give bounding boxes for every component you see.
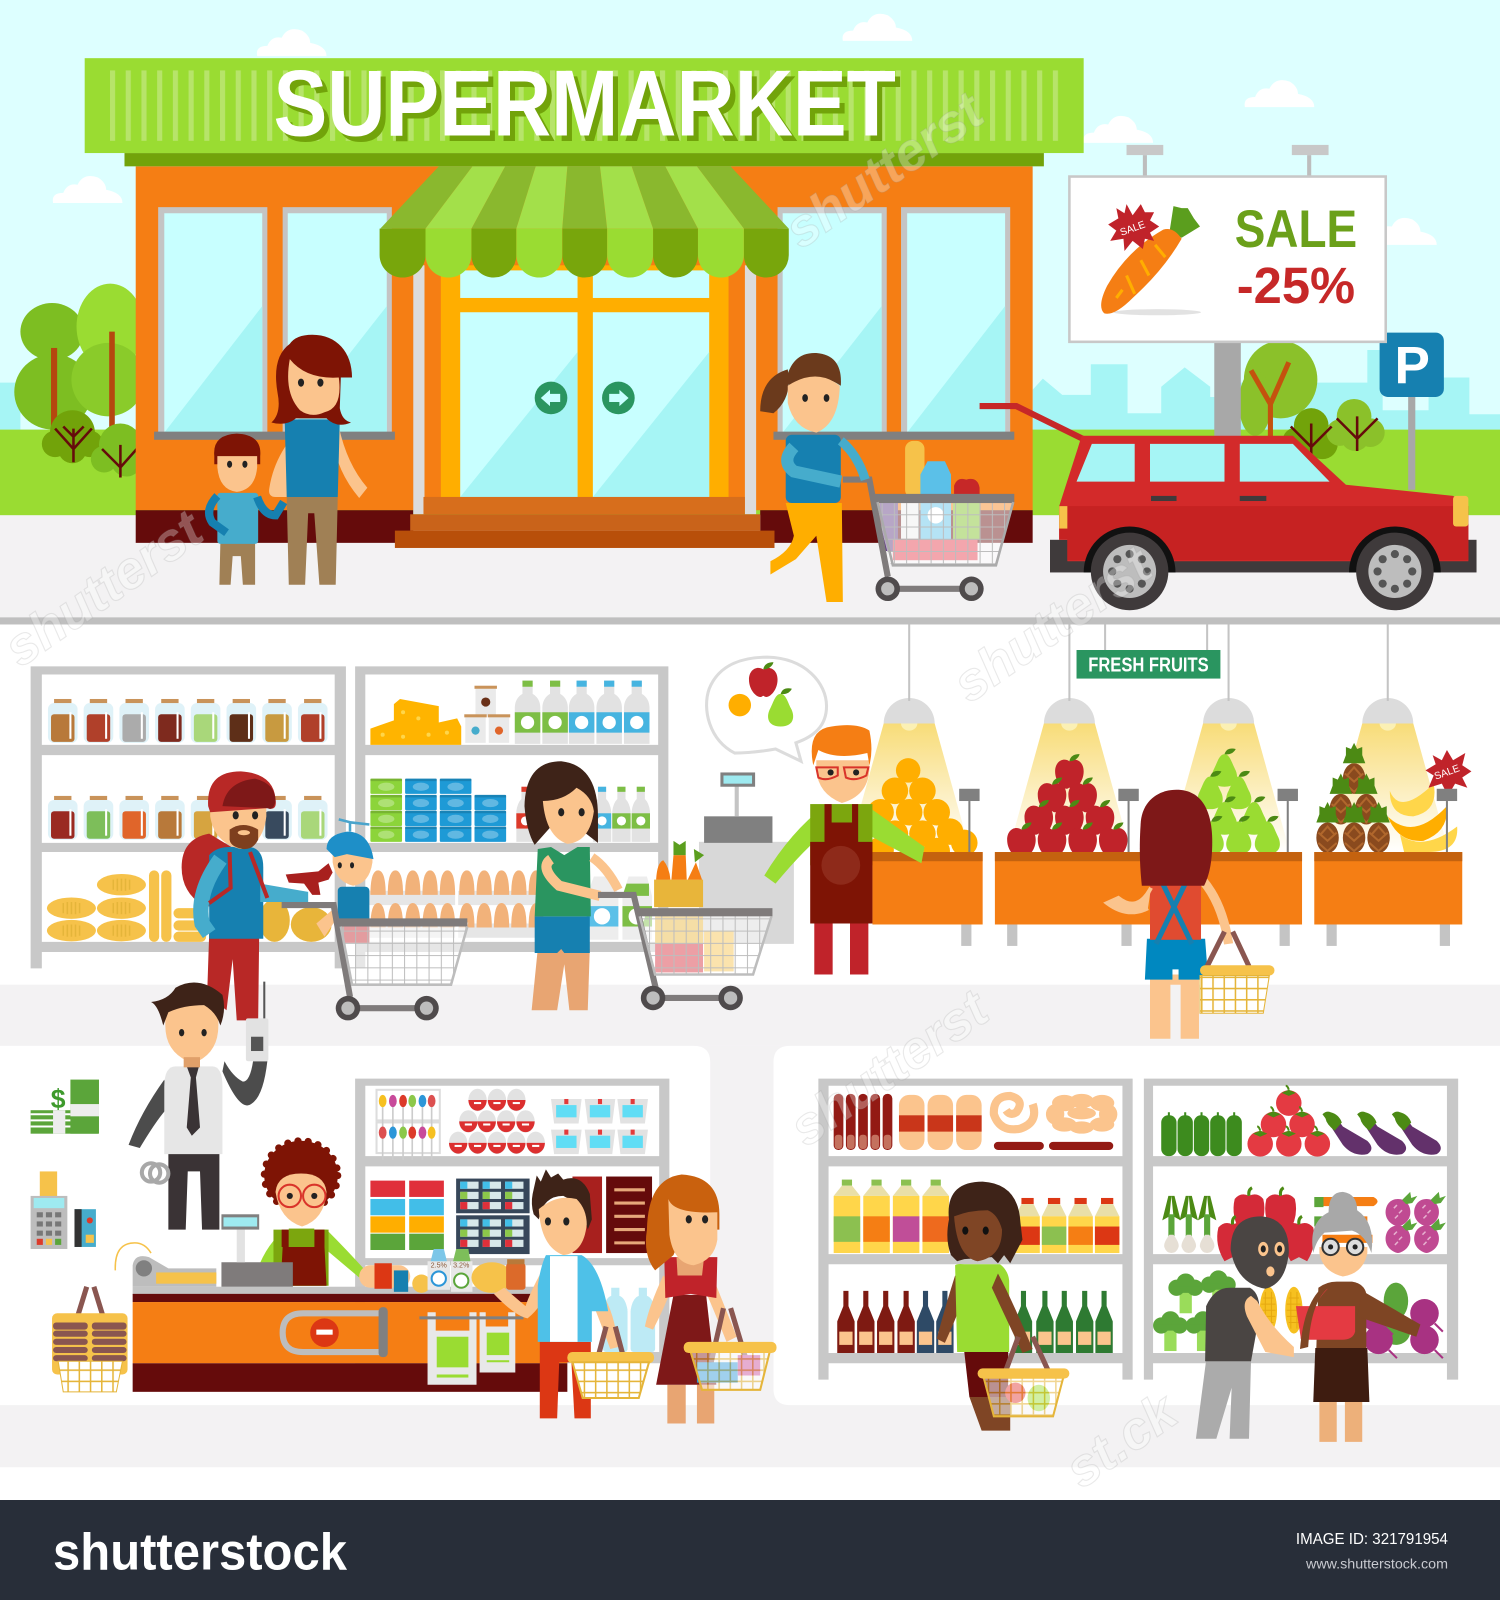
broccoli [1153,1270,1236,1351]
beets [1386,1192,1446,1253]
shopping cart: man [282,905,468,1020]
parking sign: P [1395,337,1430,396]
sign: fresh fruits [1077,624,1220,679]
trees and bushes right [1239,341,1385,459]
shopping cart with groceries: entrance [843,441,1014,601]
entrance steps [395,497,774,548]
shopping cart with carrots [598,841,772,1010]
person: woman with cart in green [524,761,618,1010]
groceries on counter: 2.5% [431,1261,448,1269]
snack packets [370,1177,652,1254]
register box [221,1214,293,1287]
person: woman with shopping cart [760,353,865,602]
basket: fruit woman [1200,932,1274,1013]
watermark: shutterst [0,498,215,678]
trees left [14,284,145,478]
basket: shelf shopper [978,1337,1069,1416]
peppers [1217,1188,1314,1261]
produce scales [959,789,1457,852]
storefront building [136,166,1033,548]
watermark: shutterst [774,80,996,260]
person: woman in green top [937,1182,1069,1431]
person: security guard [129,982,268,1230]
carrots [1314,1197,1378,1243]
person: man in blue jacket [494,1169,654,1418]
greens and radishes [1360,1283,1443,1358]
watermark: st.ck [1055,1381,1190,1500]
awning [380,166,789,278]
person: child [209,434,284,585]
spring onions [1162,1196,1216,1253]
billboard: sale: -25% [1237,257,1355,314]
shelf: sweets and packets [355,1079,669,1363]
apples [1007,754,1128,857]
person: man with backpack [182,771,308,1020]
sausages [834,1094,1117,1150]
watermark: shutterst [779,978,1001,1158]
turnstile [283,1307,388,1357]
banner with title [85,51,1084,166]
milk bottles row [515,681,649,744]
cheese [370,699,461,745]
billboard: sale [1069,145,1386,439]
milk cartons by the shelf [587,877,652,940]
pears [1198,748,1280,854]
shopping bags [419,1312,523,1385]
icon: money stack [31,1080,99,1134]
checkout counter [115,1214,567,1392]
person: elderly woman [1296,1192,1420,1442]
display counters [872,852,1462,946]
clouds [53,14,1437,245]
jars [48,699,328,840]
person: cashier [252,1141,365,1286]
red car [980,406,1477,610]
shop windows [154,207,1014,440]
watermark [0,80,1190,1500]
food containers [370,779,650,842]
cups [464,686,510,743]
basket: man [567,1327,654,1398]
title: SUPERMARKET [273,51,896,156]
lollipops [377,1090,440,1160]
icon: carrot with sale tag: SALE [1119,219,1147,239]
watermark: shutterst [942,534,1164,714]
parking sign [1380,333,1444,490]
eggplants [1322,1112,1441,1155]
scene: street background [0,0,1500,624]
sign: fresh fruits: FRESH FRUITS [1088,654,1209,676]
person: mother [269,335,367,585]
person: woman in red dress [645,1174,777,1423]
icon: stacked baskets [52,1287,128,1392]
hanging lamps [848,624,1449,852]
egg-shaped candies [449,1089,545,1154]
bread [47,870,332,942]
interior floor [0,985,1500,1500]
bananas [1388,784,1457,852]
icon: card terminal [31,1171,96,1249]
walkie-talkie [246,982,268,1061]
sale starburst [1426,750,1471,796]
corn [1260,1287,1303,1334]
entrance doors [413,265,756,514]
checkout stand: register [699,772,794,944]
blue-label packs [551,1099,648,1154]
shelf: meat, juice, wine [818,1079,1133,1380]
handcuffs [142,1163,168,1183]
sale starburst: SALE [1433,763,1461,783]
shelf: vegetables [1144,1079,1458,1380]
wine bottles [837,1291,1113,1353]
shelf: jars and bread [31,666,346,968]
title: SUPERMARKET [279,56,901,161]
image id: IMAGE ID: 321791954 [1296,1531,1448,1548]
shelf: dairy and eggs [355,666,668,968]
person: fruit seller [764,725,924,974]
basket: woman [684,1308,777,1390]
oranges [867,758,978,864]
wheels [1084,527,1441,610]
pineapples [1316,743,1390,853]
eggs [369,870,544,938]
water bottles [603,1288,655,1352]
person: baby with toy [286,819,373,943]
fruit department [848,624,1471,946]
tomatoes [1247,1086,1330,1157]
billboard: sale: SALE [1235,200,1357,259]
cucumbers [1161,1112,1242,1156]
person: masked thief [1196,1216,1294,1439]
speech bubble with fruits [707,657,827,761]
groceries on counter: 3.2% [453,1261,470,1269]
icon: money stack: $ [51,1084,66,1114]
person: woman at fruit counter [1107,790,1274,1039]
icon: carrot with sale tag [1101,204,1201,315]
footer logo: shutterstock [53,1523,347,1581]
groceries on counter [359,1249,526,1293]
barcode scanner [115,1243,216,1287]
footer bar [0,1500,1500,1600]
website: www.shutterstock.com [1305,1556,1448,1572]
juice bottles [834,1180,1119,1253]
